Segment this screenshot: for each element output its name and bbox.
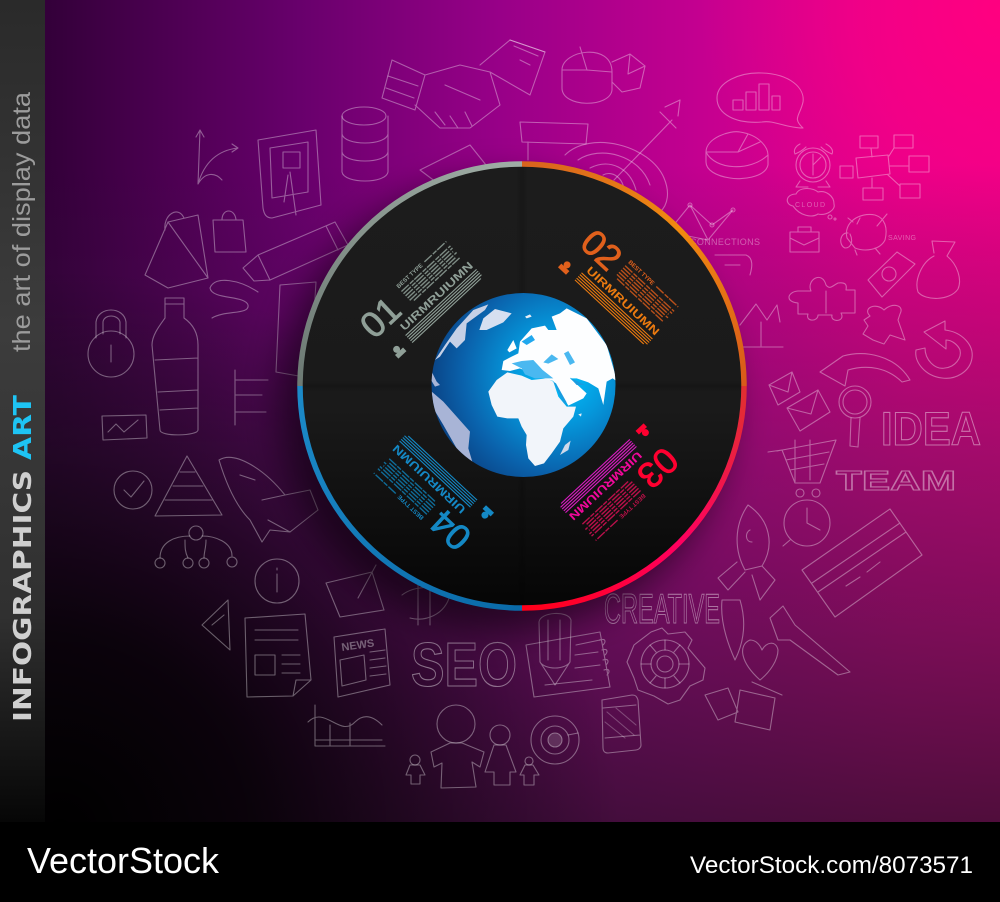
label: cloud: CLOUD (795, 202, 825, 209)
icon: side flow chart (235, 282, 316, 425)
globe ocean (432, 293, 616, 477)
rule lines (406, 269, 483, 343)
heading: UIRMRUIUMN (566, 449, 644, 522)
icon: speech bubble chart (717, 73, 803, 128)
ring segment: orange (522, 164, 744, 386)
icon: banknote (868, 252, 915, 297)
number 01: 01 (352, 289, 409, 346)
icon: heart (743, 640, 778, 680)
label: idea: IDEA (881, 402, 981, 455)
icon: shopping cart (768, 440, 836, 497)
icon: stick figures family (406, 705, 539, 788)
icon: document page (245, 614, 311, 697)
icon: pyramid (155, 456, 222, 516)
paragraph: BEST TYPE (626, 260, 655, 287)
icon: target with arrow (420, 100, 680, 212)
icon: flow boxes (840, 135, 929, 200)
icon: check circle (114, 471, 152, 509)
icon: database stack (342, 107, 388, 181)
icon: triangle flag (202, 600, 230, 650)
label: seo: SEO (411, 631, 517, 700)
paragraph: BEST TYPE (618, 492, 646, 519)
icon: note with pencil (326, 565, 384, 617)
heading: UIRMRUIUMN (584, 265, 661, 338)
label: news: NEWS (341, 637, 375, 654)
icon: cloud (787, 188, 836, 220)
section 02 (558, 221, 687, 348)
icon: line chart sketch (740, 304, 783, 347)
icon: wallet and papers (705, 682, 782, 730)
label: connections: CONNECTIONS (690, 237, 760, 247)
left sidebar (0, 0, 45, 822)
icon: piggy bank (841, 214, 887, 255)
globe continents (430, 304, 617, 466)
rule lines (575, 273, 652, 346)
circular panel (300, 164, 744, 608)
ring segment: blue (300, 386, 522, 608)
icon: person (558, 259, 574, 275)
doodle lettering (341, 202, 916, 654)
paragraph: BEST TYPE (397, 493, 426, 520)
icon: scribble (210, 280, 258, 318)
paragraph: BEST TYPE (396, 263, 424, 290)
disc (300, 164, 744, 608)
icon: pencil (243, 222, 348, 281)
icon: padlock (88, 310, 134, 377)
icon: person (391, 343, 406, 359)
icon: shopping bag B (213, 211, 246, 252)
icon: handshake (382, 40, 545, 128)
ring segment: grey (300, 164, 522, 386)
globe (430, 293, 617, 477)
icon: puzzle pieces (789, 277, 905, 344)
hand-drawn doodle layer (88, 40, 972, 788)
icon: space shuttle (219, 457, 318, 542)
icon: connections graph (666, 203, 752, 275)
heading: UIRMRUIUMN (398, 260, 476, 333)
icon: branching arrows (196, 130, 238, 184)
icon: person (478, 505, 494, 521)
icon: pie and cube (562, 47, 645, 103)
tagline: the art of display data (8, 92, 36, 352)
section 04 (365, 432, 494, 559)
number 03: 03 (629, 439, 687, 497)
heading: UIRMRUIUMN (391, 442, 468, 515)
icon: briefcase (790, 227, 819, 252)
icon: alarm clock (794, 144, 833, 187)
label: creative: CREATIVE (604, 585, 720, 632)
disc fold lines (300, 165, 744, 608)
watermark brand: VectorStock (27, 840, 220, 881)
icon: tablet with hand (258, 130, 321, 218)
icon: wall clock (783, 500, 830, 546)
icon: 3d pie chart (706, 132, 768, 179)
ring segment: red (522, 386, 744, 608)
icon: newspaper (334, 629, 390, 697)
globe seas (512, 335, 585, 403)
icon: coffee cup (531, 716, 579, 764)
bottom watermark bar (0, 822, 1000, 902)
icon: gear (627, 628, 705, 704)
icon: info circle (255, 559, 299, 603)
icon: line graph (308, 705, 385, 746)
rule lines (400, 434, 477, 507)
icon: circular arrow (916, 321, 972, 378)
number 04: 04 (422, 502, 479, 559)
sidebar title: infographics: INFOGRAPHICS (8, 470, 37, 722)
number 02: 02 (573, 221, 630, 278)
icon: magnifying glass (839, 386, 871, 447)
icon: organisation chart (155, 526, 237, 568)
icon: person (636, 423, 651, 439)
icon: money bag (917, 241, 960, 298)
label: team: TEAM (836, 465, 956, 496)
icon: shopping bag A (145, 212, 208, 288)
section 03 (557, 423, 687, 550)
icon: presentation board (102, 415, 147, 440)
icon: dollar sign (402, 580, 450, 625)
icon: tie and hammer (770, 606, 850, 675)
icon: notebook with pencil (526, 613, 610, 697)
icon: curved arrow (820, 354, 910, 386)
icon: rocket (718, 505, 775, 660)
icon: smartphone (602, 695, 641, 753)
icon: bottle (152, 298, 198, 435)
label: saving: SAVING (888, 235, 916, 242)
disc drop shadow (279, 179, 731, 631)
icon: envelopes (769, 372, 830, 431)
section 01 (352, 232, 485, 362)
watermark url: VectorStock.com/8073571 (690, 852, 973, 879)
rule lines (559, 439, 636, 513)
sidebar title: art: ART (8, 395, 37, 460)
icon: credit card (802, 509, 922, 617)
